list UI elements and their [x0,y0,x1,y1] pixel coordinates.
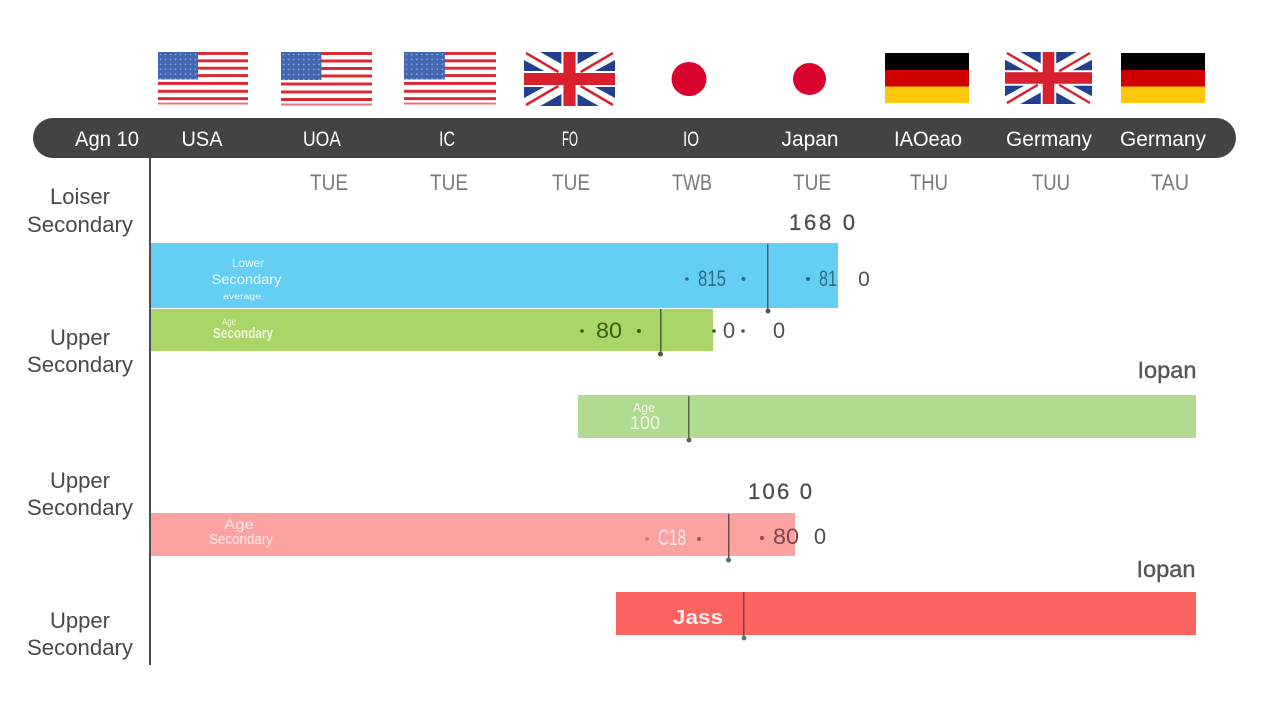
day labels row: TAU [1151,170,1189,195]
bar caption: Age [224,516,254,532]
row label 3: Upper [50,468,110,493]
day labels row: TUE [430,170,468,195]
header labels: UOA [303,128,341,151]
header labels: IO [683,128,699,151]
bar caption [630,400,660,433]
row label 1: Loiser [50,184,110,209]
bar: green upper secondary: 0 [773,318,785,343]
flag: UK 2 [1005,52,1092,104]
row label 4: Secondary [27,635,133,660]
bar values [580,318,716,343]
marker line [686,396,692,442]
flag: UK 1 [524,52,615,106]
value: blue bar top: 168 0 [789,210,855,235]
bar values: 815 [698,266,726,291]
row label 4 [27,608,133,660]
header labels [75,128,1206,151]
bar values: C18 [658,525,686,550]
header labels: Germany [1120,128,1206,151]
bar caption: Secondary [212,271,282,287]
bar caption: Secondary [213,325,274,342]
marker line [658,309,663,356]
bar: red [616,592,1196,640]
bar caption: 100 [630,413,660,433]
bar caption: Secondary [209,531,273,548]
flag: Japan 1 [672,62,706,96]
bar: blue lower secondary: 0 [858,268,870,291]
bar values: 81 [819,266,837,291]
flag: USA 1 [158,52,248,105]
day labels row: TUU [1032,170,1070,195]
marker line [726,514,731,562]
bar values [685,266,837,291]
row label 2 [27,325,133,377]
bar caption: Age [633,400,655,415]
bar values: 80 [596,318,622,343]
header bar [33,118,1236,158]
row label 1 [27,184,133,237]
bar caption [212,256,282,301]
bar: light green [578,395,1196,442]
header labels: USA [182,128,222,151]
row labels [27,184,133,660]
header labels: Germany [1006,128,1092,151]
row label 4: Upper [50,608,110,633]
bar caption [209,516,273,548]
header labels: IAOeao [894,128,962,151]
row label 3 [27,468,133,520]
day labels row: TUE [552,170,590,195]
bar caption: Jass [673,607,723,629]
day labels row: TUE [793,170,831,195]
bar values [645,524,799,550]
day labels row: TWB [672,170,712,195]
day labels row [310,170,1189,195]
header labels: IC [439,128,455,151]
flag: USA 3 [404,52,496,105]
vertical axis [149,158,151,665]
marker line [742,592,746,640]
header labels: FO [562,128,578,151]
value: pink bar top: 106 0 [748,479,812,504]
row label 2: Upper [50,325,110,350]
bar caption [213,317,274,342]
row label 1: Secondary [27,212,133,237]
label: Japan upper: Iopan [1138,357,1196,383]
bar caption: Lower [232,256,264,270]
bar: blue lower secondary [151,243,870,314]
row label 2: Secondary [27,352,133,377]
flag: USA 2 [281,52,372,106]
bar values: 80 [773,524,799,549]
flag: Japan 2 [793,63,826,95]
flag: Germany 1 [885,53,969,103]
day labels row: THU [910,170,948,195]
flag: Germany 2 [1121,53,1205,103]
flags row [158,52,1205,106]
bar caption: average [223,292,262,301]
bar: pink: 0 [814,524,826,549]
header labels: Agn 10 [75,128,139,151]
day labels row: TUE [310,170,348,195]
bar: green upper secondary: 0 [723,318,735,343]
label: Japan lower: Iopan [1136,556,1196,582]
row label 3: Secondary [27,495,133,520]
marker line [766,244,770,314]
header labels: Japan [782,128,838,151]
bar: pink [151,513,826,562]
bar caption: Age [222,317,236,328]
bar: green upper secondary [151,309,785,356]
